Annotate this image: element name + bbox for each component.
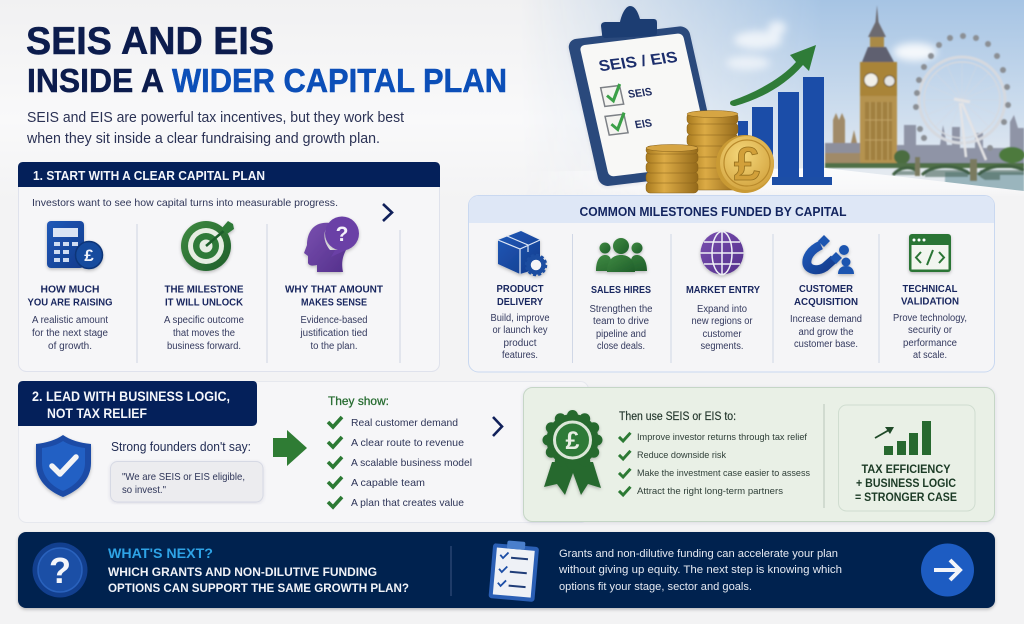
title: SEIS AND EIS: [26, 20, 274, 63]
they show list: A plan that creates value: [351, 497, 464, 509]
panel: what's next banner: [18, 532, 995, 608]
description: Evidence-based: [300, 315, 368, 326]
icon: rosette with pound: £: [566, 427, 580, 455]
description: [590, 304, 653, 352]
heading: DELIVERY: [497, 296, 543, 308]
section 2 header: [18, 381, 257, 426]
icon: checklist clipboard: [488, 539, 539, 602]
heading: WHY THAT AMOUNT: [285, 284, 384, 296]
then use list: [619, 411, 810, 497]
quote box: [110, 462, 263, 502]
description: [32, 315, 108, 352]
description: and grow the: [798, 327, 854, 338]
milestones header: COMMON MILESTONES FUNDED BY CAPITAL: [580, 204, 847, 219]
heading: MAKES SENSE: [301, 296, 367, 308]
icon: question circle: ?: [49, 550, 71, 591]
milestone: product delivery: [490, 231, 550, 361]
heading: [901, 283, 959, 308]
growth arrow: [730, 45, 816, 106]
column: the milestone it will unlock: [164, 221, 244, 352]
icon: calculator with pound: £: [84, 246, 94, 265]
bar chart: [738, 77, 832, 185]
clipboard clip: [601, 6, 657, 38]
description: [300, 315, 368, 352]
they show list: [328, 394, 472, 509]
London skyline: [726, 5, 1024, 192]
equation text: + BUSINESS LOGIC: [856, 478, 956, 490]
they show list: A capable team: [351, 477, 425, 489]
next question: OPTIONS CAN SUPPORT THE SAME GROWTH PLAN?: [108, 583, 409, 595]
description: justification tied: [300, 328, 368, 339]
sky background: [552, 0, 1024, 182]
description: [790, 314, 862, 350]
description: performance: [903, 338, 957, 349]
description: [893, 313, 967, 361]
section 2 header: NOT TAX RELIEF: [47, 405, 147, 421]
description: pipeline and: [596, 329, 646, 340]
panel: 1. start with a clear capital plan: [18, 162, 440, 372]
table surface: [630, 168, 1024, 194]
heading: HOW MUCH: [40, 284, 100, 296]
heading: [496, 283, 544, 308]
column: how much you are raising: [28, 221, 112, 352]
description: features.: [502, 350, 538, 361]
they show list: A scalable business model: [351, 457, 472, 469]
trees, water and bridge: [894, 150, 910, 164]
milestone: customer acquisition: [790, 235, 862, 350]
description: options fit your stage, sector and goals.: [559, 581, 752, 593]
section 2 header: 2. LEAD WITH BUSINESS LOGIC,: [32, 388, 230, 404]
icon: magnet and customers: [807, 235, 854, 274]
chevron: [383, 204, 392, 221]
callout: tax efficiency equation: [838, 405, 975, 511]
quote box: "We are SEIS or EIS eligible,: [122, 471, 245, 483]
then use list: Improve investor returns through tax relief: [637, 432, 807, 443]
description: without giving up equity. The next step is knowing which: [558, 564, 842, 576]
icon: target with dart: [181, 221, 234, 271]
description: Grants and non-dilutive funding can accelerate your plan: [559, 548, 838, 560]
heading: [164, 284, 244, 308]
description: [692, 304, 753, 352]
heading: SALES HIRES: [591, 284, 651, 296]
description: that moves the: [173, 328, 235, 339]
icon: question circle: [32, 542, 88, 598]
clipboard: EIS: [634, 117, 653, 131]
heading: PRODUCT: [496, 283, 544, 295]
clouds: [726, 21, 937, 70]
hero illustration: London skyline, clipboard, coins, growth chart: [520, 0, 1024, 197]
eye: [919, 57, 1005, 160]
next question: WHICH GRANTS AND NON-DILUTIVE FUNDING: [108, 567, 377, 579]
subtitle: SEIS and EIS are powerful tax incentives, but they work best: [27, 109, 405, 126]
description: segments.: [700, 341, 744, 352]
section 1 header: 1. START WITH A CLEAR CAPITAL PLAN: [33, 168, 265, 183]
mini growth chart: [875, 421, 931, 455]
heading: [285, 284, 384, 308]
icon: rosette with pound: [542, 410, 602, 495]
description: for the next stage: [32, 328, 108, 339]
description: customer base.: [794, 339, 858, 350]
then use list: Make the investment case easier to assess: [637, 468, 810, 479]
description: close deals.: [597, 341, 645, 352]
heading: IT WILL UNLOCK: [165, 296, 243, 308]
panel: 2. lead with business logic: [18, 381, 588, 522]
equation text: = STRONGER CASE: [855, 492, 957, 504]
title: [26, 20, 507, 99]
subtitle: when they sit inside a clear fundraising and growth plan.: [26, 130, 380, 147]
far buildings: [895, 115, 1024, 165]
description: [490, 313, 550, 361]
coin stack short: [646, 144, 698, 193]
icon: head with question bubble: ?: [336, 223, 348, 246]
description: new regions or: [692, 316, 753, 327]
icon: code window: [909, 234, 951, 272]
description: A realistic amount: [32, 315, 108, 326]
description: A specific outcome: [164, 315, 244, 326]
next question: [108, 567, 409, 595]
description: customer: [702, 329, 742, 340]
then use list: Reduce downside risk: [637, 450, 726, 461]
strong founders label: Strong founders don't say:: [111, 440, 251, 454]
what's next heading: WHAT'S NEXT?: [108, 545, 213, 561]
chevron: [493, 417, 502, 436]
intro sentence: Investors want to see how capital turns into measurable progress.: [32, 197, 338, 209]
heading: MARKET ENTRY: [686, 284, 760, 296]
heading: TECHNICAL: [902, 283, 958, 295]
heading: YOU ARE RAISING: [28, 296, 112, 308]
they show list: Real customer demand: [351, 417, 458, 429]
title: INSIDE A: [27, 62, 164, 99]
description: team to drive: [593, 316, 649, 327]
description: security or: [908, 325, 953, 336]
icon: globe: [700, 232, 744, 274]
title: WIDER CAPITAL PLAN: [172, 62, 507, 99]
heading: ACQUISITION: [794, 296, 858, 308]
description: of growth.: [48, 341, 92, 352]
they show list: A clear route to revenue: [351, 437, 464, 449]
icon: shield with check: [36, 435, 91, 497]
then use list: Then use SEIS or EIS to:: [619, 411, 736, 423]
icon: box with gear: [498, 231, 546, 275]
subtitle: [26, 109, 405, 147]
arrow button: [921, 544, 974, 596]
milestone: sales hires: [590, 238, 653, 352]
panel: then use SEIS or EIS: [524, 388, 994, 522]
description: Prove technology,: [893, 313, 967, 324]
description: at scale.: [913, 350, 947, 361]
heading: [794, 283, 858, 308]
description: Build, improve: [490, 313, 550, 324]
pound coin: [716, 135, 774, 193]
heading: [28, 284, 112, 308]
description: business forward.: [167, 341, 241, 352]
then use list: Attract the right long-term partners: [637, 486, 783, 497]
column: why that amount makes sense: [285, 216, 384, 352]
panel: common milestones funded by capital: [468, 196, 994, 372]
parliament left: [825, 113, 860, 167]
description: to the plan.: [310, 341, 358, 352]
coin stack tall: [687, 110, 738, 190]
heading: THE MILESTONE: [164, 284, 244, 296]
arrow: [273, 430, 307, 466]
they show list: They show:: [328, 394, 389, 408]
heading: CUSTOMER: [799, 283, 853, 295]
description: product: [504, 338, 537, 349]
milestones header: [469, 196, 994, 223]
description: [164, 315, 244, 352]
heading: VALIDATION: [901, 296, 959, 308]
description: or launch key: [492, 325, 548, 336]
clipboard: [567, 6, 721, 187]
quote box: so invest.": [122, 484, 166, 496]
clipboard: SEIS / EIS: [597, 49, 679, 75]
icon: three people: [596, 238, 647, 272]
equation text: TAX EFFICIENCY: [862, 464, 951, 476]
milestone: technical validation: [893, 234, 967, 361]
description: Expand into: [697, 304, 747, 315]
big ben: [868, 5, 886, 37]
section 1 header: [18, 162, 440, 187]
clipboard: SEIS: [627, 86, 653, 101]
equation text: [855, 464, 957, 504]
description: [558, 548, 842, 593]
description: Increase demand: [790, 314, 862, 325]
milestone: market entry: [686, 232, 760, 352]
description: Strengthen the: [590, 304, 653, 315]
pound coin: £: [734, 137, 760, 190]
